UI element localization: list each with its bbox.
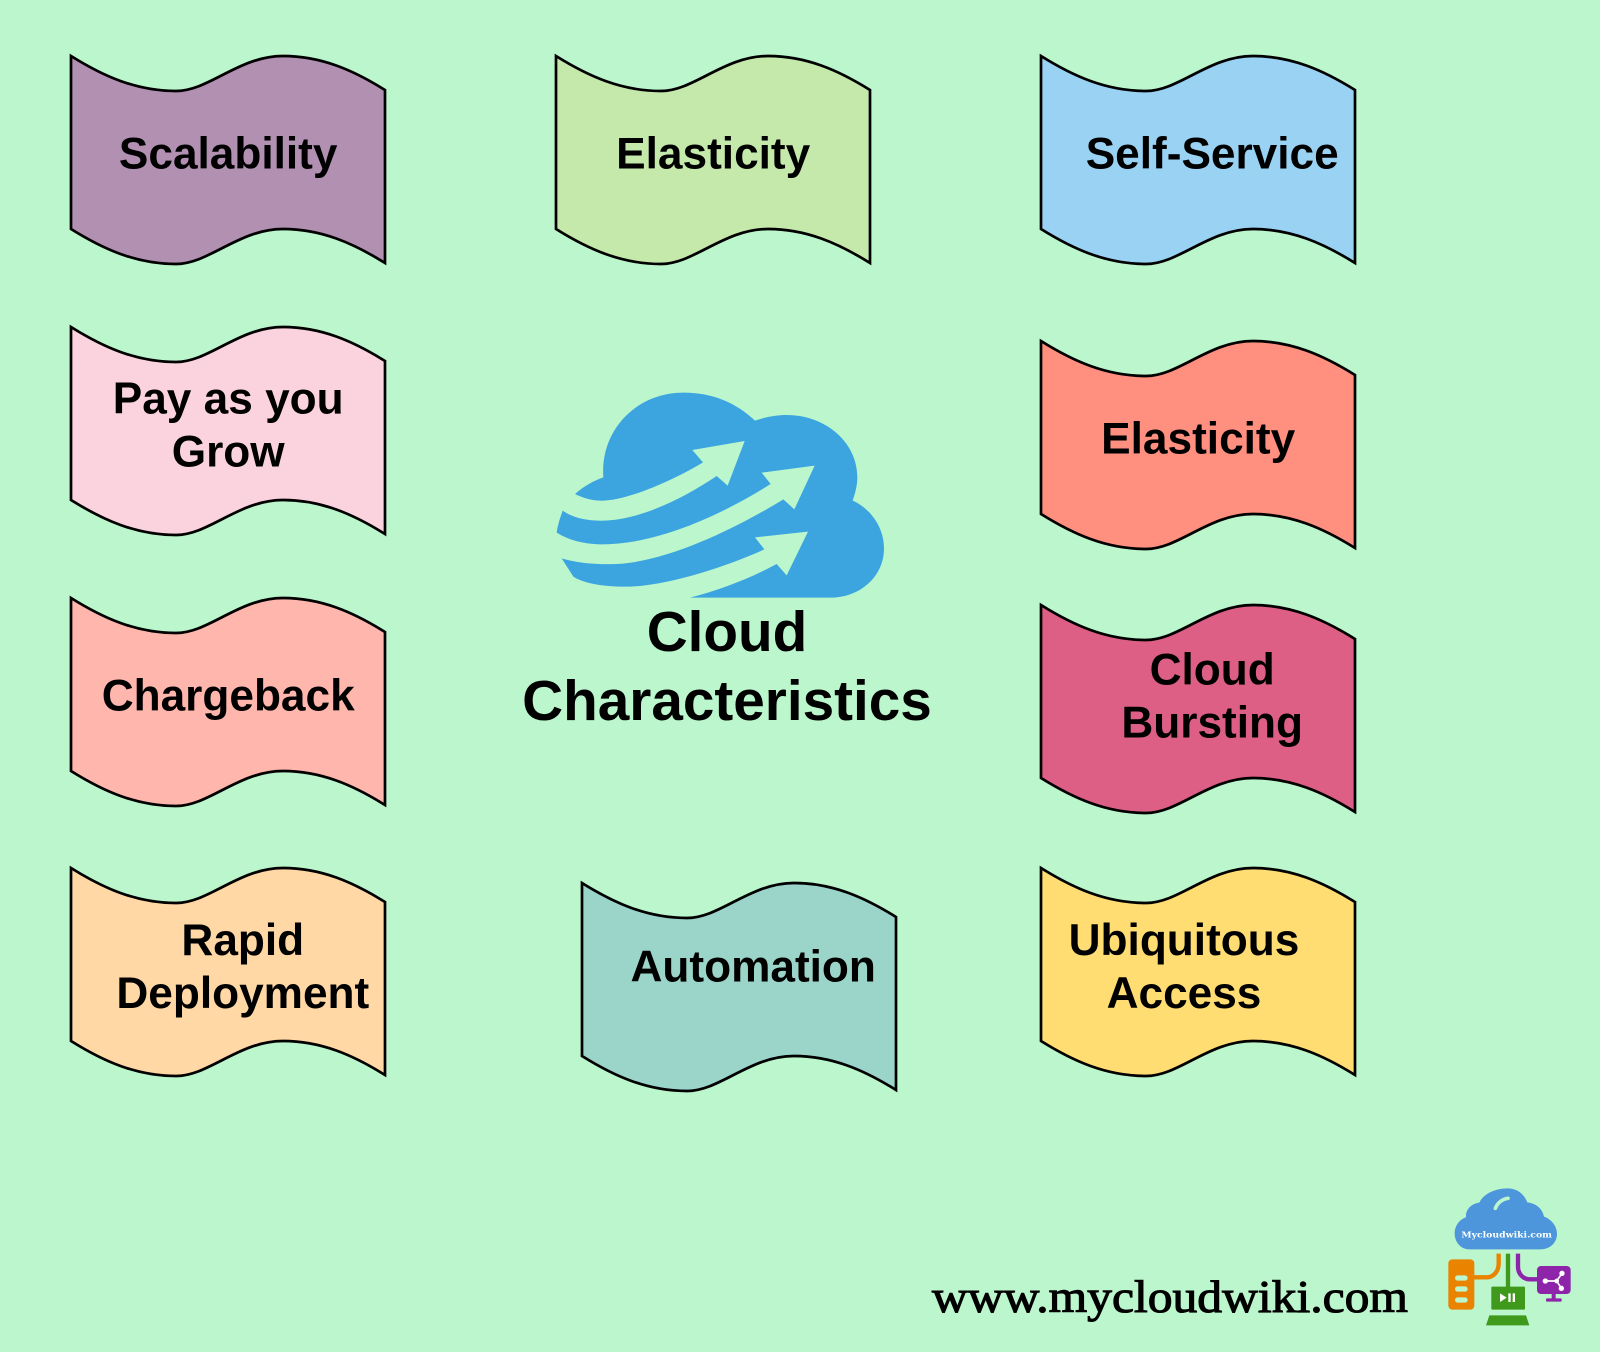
flag: Elasticity (top): Elasticity — [616, 129, 811, 178]
flag: Self-Service: Self-Service — [1086, 129, 1339, 178]
logo laptop — [1486, 1287, 1529, 1325]
logo connectors — [1473, 1254, 1538, 1287]
icon: mycloudwiki logo — [1448, 1188, 1571, 1325]
flag: Pay as you Grow: Pay as you — [113, 374, 344, 423]
title: Cloud — [647, 601, 807, 664]
flag: Pay as you Grow — [71, 327, 385, 535]
logo monitor — [1537, 1266, 1571, 1302]
flag: Ubiquitous Access: Access — [1107, 969, 1261, 1018]
flag: Elasticity (right): Elasticity — [1101, 415, 1296, 464]
flag: Elasticity (right) — [1041, 341, 1355, 549]
flag: Rapid Deployment — [71, 868, 385, 1076]
logo server — [1448, 1259, 1474, 1310]
title — [522, 601, 932, 733]
flag: Chargeback: Chargeback — [102, 671, 355, 720]
flag: Pay as you Grow: Grow — [172, 427, 285, 476]
flag: Ubiquitous Access: Ubiquitous — [1069, 916, 1299, 965]
flag: Automation: Automation — [630, 942, 876, 991]
flag: Cloud Bursting — [1041, 605, 1355, 813]
flag: Scalability: Scalability — [119, 129, 338, 178]
flag: Automation — [582, 883, 896, 1091]
flag: Cloud Bursting: Bursting — [1121, 698, 1303, 747]
website url: www.mycloudwiki.com — [932, 1271, 1408, 1322]
flag: Cloud Bursting: Cloud — [1150, 645, 1275, 694]
flag: Scalability — [71, 56, 385, 264]
icon: central cloud with arrows — [557, 393, 884, 598]
title: Characteristics — [522, 670, 932, 733]
flag: Rapid Deployment: Deployment — [116, 969, 370, 1018]
logo cloud: Mycloudwiki.com — [1461, 1229, 1552, 1239]
flag: Ubiquitous Access — [1041, 868, 1355, 1076]
flag: Self-Service — [1041, 56, 1355, 264]
flag: Elasticity (top) — [556, 56, 870, 264]
flag: Rapid Deployment: Rapid — [181, 916, 304, 965]
flag: Chargeback — [71, 598, 385, 806]
